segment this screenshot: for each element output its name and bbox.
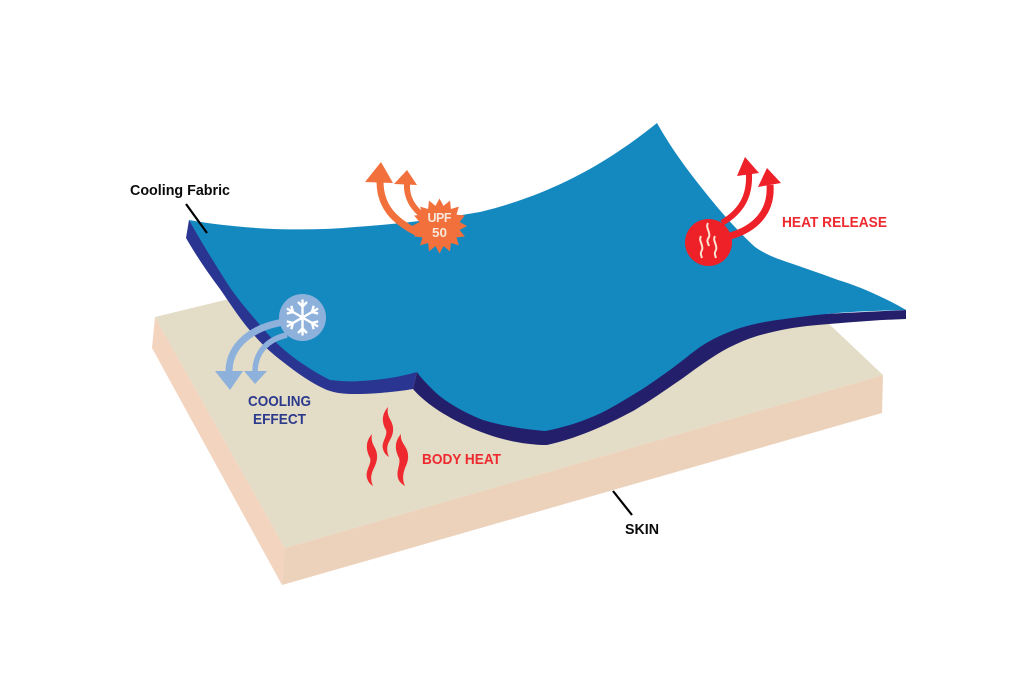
label: skin: SKIN (625, 522, 659, 538)
label: cooling fabric (130, 183, 230, 233)
fabric top surface (189, 123, 906, 431)
icon: heat release circle with arrows (685, 157, 781, 266)
label: heat release: HEAT RELEASE (782, 214, 887, 231)
label: cooling effect: COOLING (248, 393, 311, 410)
icon: cooling snowflake with arrows (215, 294, 326, 390)
label: cooling effect line two: EFFECT (253, 411, 306, 428)
icon: body heat waves (367, 407, 408, 486)
icon: UPF 50 sun with reflected arrows: 50 (432, 226, 447, 240)
fabric edge: left dark blue side (186, 220, 417, 394)
label: body heat: BODY HEAT (422, 451, 501, 468)
icon: UPF 50 sun with reflected arrows: UPF (428, 211, 452, 225)
label: cooling fabric: Cooling Fabric (130, 183, 230, 199)
icon: UPF 50 sun with reflected arrows (365, 162, 467, 254)
skin slab (152, 290, 883, 585)
label: skin (613, 491, 659, 538)
fabric edge: right navy side (413, 310, 906, 445)
